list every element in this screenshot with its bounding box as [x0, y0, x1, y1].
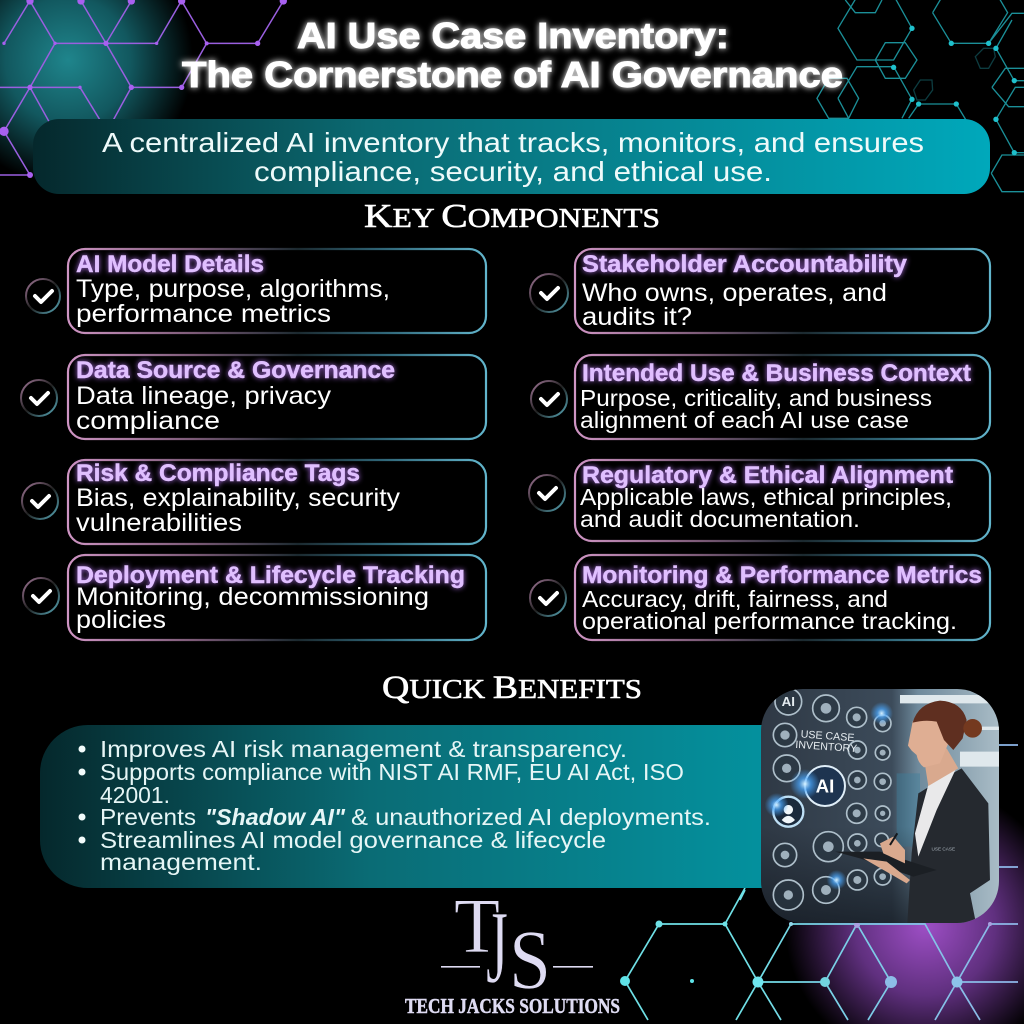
icon: check 4	[23, 578, 59, 614]
photo: woman with tablet and AI use case inventory screen: INVENTORY	[795, 739, 857, 755]
panel: risk and compliance tags	[68, 460, 486, 544]
logo: TJS monogram	[441, 882, 593, 1007]
network: hexagons bottom right	[620, 745, 1018, 1020]
photo: woman with tablet and AI use case inventory screen: USE CASE	[800, 728, 855, 744]
panel: monitoring and performance metrics: Accuracy, drift, fairness, and	[582, 586, 888, 612]
panel: AI model details	[68, 249, 486, 333]
tablet	[835, 852, 937, 877]
logo: TJS monogram: S	[509, 913, 551, 1007]
panel: monitoring and performance metrics	[575, 555, 990, 640]
title: The Cornerstone of AI Governance	[182, 54, 843, 95]
panel: stakeholder accountability: Who owns, operates, and	[582, 279, 887, 307]
panel: quick benefits list: Supports compliance with NIST AI RMF, EU AI Act, ISO	[100, 759, 684, 785]
icon: check 1	[26, 279, 60, 313]
logo: TJS monogram: J	[486, 890, 508, 1005]
panel: quick benefits list: Streamlines AI model governance & lifecycle	[100, 827, 606, 853]
heading: key components: KEY COMPONENTS	[364, 198, 660, 235]
panel: deployment and lifecycle tracking	[68, 555, 486, 640]
panel: data source and governance: compliance	[76, 407, 220, 435]
icon: check 8	[530, 580, 566, 616]
panel: stakeholder accountability	[575, 249, 990, 333]
hands	[863, 837, 910, 883]
title: AI Use Case Inventory:	[297, 15, 729, 56]
photo: woman with tablet and AI use case inventory screen	[760, 688, 1000, 923]
title	[182, 15, 843, 95]
panel: quick benefits list: & unauthorized AI deployments.	[351, 804, 711, 830]
logo: company name: TECH JACKS SOLUTIONS	[405, 994, 620, 1018]
panel: intended use and business context: Purpose, criticality, and business	[580, 385, 932, 411]
hair	[913, 701, 967, 750]
panel: risk and compliance tags: vulnerabilities	[76, 509, 242, 537]
panel: AI model details: AI Model Details	[76, 251, 264, 278]
icon: check 5	[530, 274, 568, 312]
panel: deployment and lifecycle tracking: Monitoring, decommissioning	[76, 583, 429, 611]
icon: check 7	[529, 475, 565, 511]
panel: quick benefits list: "Shadow AI"	[205, 804, 346, 830]
subtitle banner: compliance, security, and ethical use.	[254, 156, 772, 187]
background: teal glow top left	[0, 0, 193, 185]
panel: stakeholder accountability: Stakeholder Accountability	[582, 251, 908, 278]
panel: AI model details: Type, purpose, algorithms,	[76, 275, 390, 303]
panel: quick benefits list	[40, 725, 775, 888]
panel: data source and governance	[68, 355, 486, 439]
panel: data source and governance: Data lineage, privacy	[76, 382, 332, 410]
panel: deployment and lifecycle tracking: policies	[76, 606, 166, 634]
icon: check 6	[531, 381, 567, 417]
icon: check 2	[21, 380, 57, 416]
shirt	[915, 767, 957, 857]
panel: quick benefits list: Improves AI risk management & transparency.	[100, 736, 627, 762]
panel: stakeholder accountability: audits it?	[582, 303, 692, 331]
photo: woman with tablet and AI use case inventory screen: AI	[816, 775, 834, 796]
suit	[907, 768, 990, 923]
panel: regulatory and ethical alignment: and audit documentation.	[580, 506, 860, 532]
panel: quick benefits list: Prevents	[100, 804, 196, 830]
subtitle banner: A centralized AI inventory that tracks, monitors, and ensures	[102, 127, 924, 158]
panel: intended use and business context: Intended Use & Business Context	[582, 360, 971, 387]
neck	[925, 748, 958, 786]
panel: risk and compliance tags: Risk & Compliance Tags	[76, 460, 360, 487]
panel: data source and governance: Data Source & Governance	[76, 357, 395, 384]
network: purple hexagons top left	[0, 0, 287, 178]
background: purple glow bottom right	[770, 780, 1024, 1024]
panel: AI model details: performance metrics	[76, 300, 331, 328]
heading: quick benefits: QUICK BENEFITS	[382, 670, 642, 706]
panel: quick benefits list: 42001.	[100, 782, 170, 808]
icon: check 3	[22, 483, 58, 519]
panel: intended use and business context	[575, 355, 990, 439]
face	[908, 720, 948, 768]
panel: monitoring and performance metrics: Monitoring & Performance Metrics	[582, 562, 982, 589]
panel: regulatory and ethical alignment	[575, 460, 990, 541]
panel: regulatory and ethical alignment: Applicable laws, ethical principles,	[580, 484, 952, 510]
photo: woman with tablet and AI use case inventory screen: USE CASE	[932, 847, 955, 852]
subtitle banner	[33, 119, 990, 194]
panel: regulatory and ethical alignment: Regulatory & Ethical Alignment	[582, 462, 953, 489]
panel: intended use and business context: alignment of each AI use case	[580, 407, 909, 433]
panel: deployment and lifecycle tracking: Deployment & Lifecycle Tracking	[76, 562, 465, 589]
network: teal hexagons top right	[817, 0, 1024, 192]
hair bun	[963, 719, 982, 738]
panel: monitoring and performance metrics: operational performance tracking.	[582, 608, 957, 634]
panel: quick benefits list: management.	[100, 849, 262, 875]
logo: TJS monogram: T	[454, 882, 500, 969]
panel: risk and compliance tags: Bias, explainability, security	[76, 484, 401, 512]
photo: woman with tablet and AI use case inventory screen: AI	[782, 694, 795, 709]
